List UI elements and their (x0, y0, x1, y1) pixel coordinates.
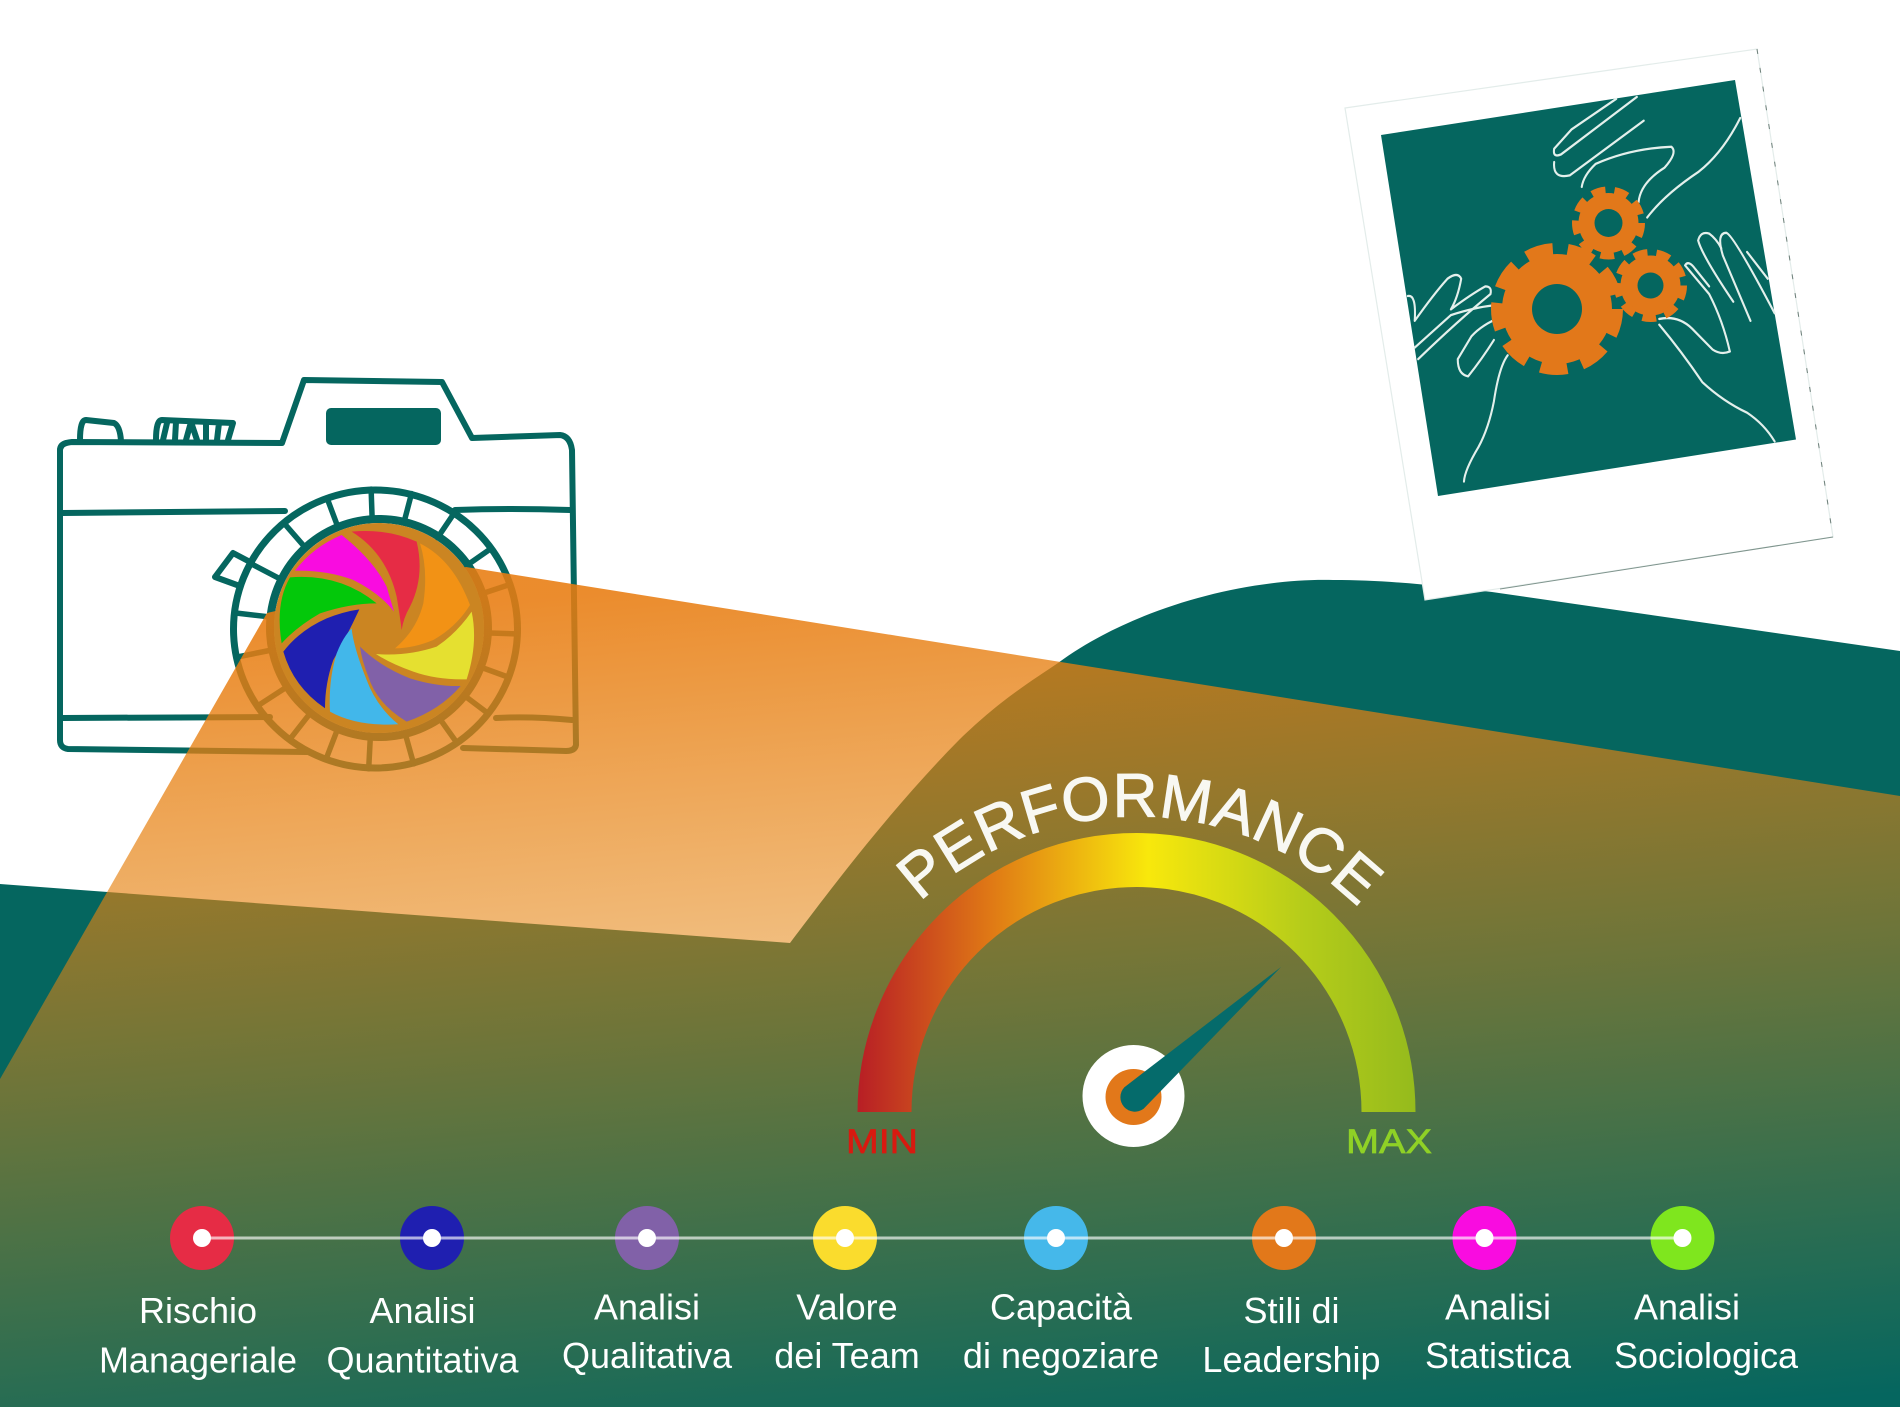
label: MIN: MIN (846, 1123, 918, 1161)
label: Analisi Statistica: Analisi (1445, 1286, 1551, 1328)
label: Valore dei Team: dei Team (774, 1335, 920, 1376)
label: Analisi Quantitativa: Quantitativa (326, 1340, 520, 1380)
timeline dots (170, 1206, 1714, 1270)
icon: large gear (1497, 249, 1617, 369)
timeline (170, 1206, 1714, 1270)
label: Analisi Quantitativa (326, 1290, 520, 1380)
label: Stili di Leadership (1202, 1290, 1381, 1380)
icon: top gear (1576, 191, 1640, 255)
heading: PERFORMANCE: PERFORMANCE (896, 774, 1384, 906)
label: Capacita di negoziare: di negoziare (963, 1335, 1159, 1376)
lens ring ticks (237, 489, 516, 769)
label: Analisi Statistica (1425, 1286, 1572, 1376)
timeline white centres (193, 1229, 1692, 1247)
label: Analisi Qualitativa (562, 1286, 733, 1376)
label: Analisi Quantitativa: Analisi (369, 1290, 476, 1331)
label: Analisi Sociologica: Analisi (1634, 1286, 1740, 1328)
label: Analisi Statistica: Statistica (1425, 1335, 1572, 1376)
gauge needle (1120, 967, 1281, 1112)
label: Analisi Qualitativa: Qualitativa (562, 1335, 733, 1376)
icon: right gear (1618, 254, 1682, 318)
label: Capacita di negoziare: Capacità (990, 1286, 1133, 1328)
label: Analisi Sociologica: Sociologica (1614, 1335, 1799, 1376)
label: Rischio Manageriale: Rischio (139, 1290, 257, 1331)
orange light beam (0, 567, 1900, 1407)
label: Rischio Manageriale (99, 1290, 297, 1380)
polaroid photo (1345, 49, 1833, 600)
label: Stili di Leadership: Leadership (1202, 1339, 1381, 1380)
label: Analisi Sociologica (1614, 1286, 1799, 1376)
icon: colourful camera iris (274, 523, 484, 733)
label: Valore dei Team: Valore (796, 1286, 898, 1328)
icon: camera outline (60, 380, 576, 769)
label: Rischio Manageriale: Manageriale (99, 1340, 297, 1380)
label: Capacita di negoziare (963, 1286, 1159, 1376)
icon: hands outline (1408, 97, 1775, 482)
gauge pivot (1082, 1045, 1184, 1147)
polaroid frame (1345, 49, 1833, 600)
gauge arc (884, 860, 1388, 1112)
photo teal background (1381, 80, 1796, 496)
background teal hill (0, 580, 1900, 1407)
timeline labels (99, 1286, 1799, 1380)
label: MAX: MAX (1346, 1123, 1432, 1161)
label: Analisi Qualitativa: Analisi (594, 1286, 700, 1328)
label: Valore dei Team (774, 1286, 920, 1376)
performance gauge (846, 774, 1432, 1161)
label: Stili di Leadership: Stili di (1243, 1290, 1340, 1331)
